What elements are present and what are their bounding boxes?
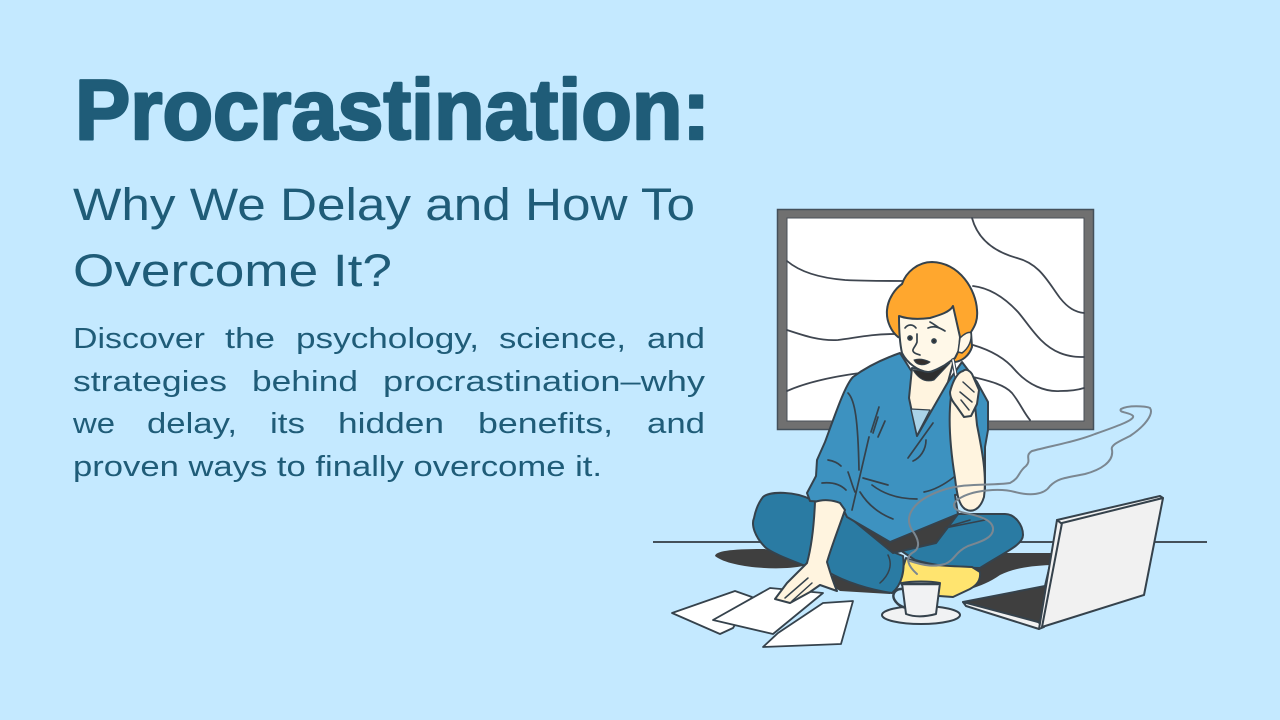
chest and neck skin [909,356,955,436]
description text block: hidden [338,408,444,440]
dark waistband shadow [843,512,958,553]
description text block: the [225,323,275,355]
description text block: strategies [73,366,227,398]
steam [908,406,1151,574]
description text block: we [72,408,115,440]
title: Procrastination: [75,63,710,158]
person [672,262,1163,647]
description text block: Discover [73,323,205,355]
subtitle: Why We Delay and How To [73,179,695,230]
description text block: behind [252,366,358,398]
right leg [900,514,1023,568]
description text block: and [647,323,705,355]
hand and pen [950,360,979,417]
inner shirt [911,409,930,435]
face [899,306,960,372]
subtitle: Overcome It? [73,245,392,296]
foot [899,558,980,597]
papers [672,588,853,647]
subtitle [73,179,695,296]
ear [958,332,971,353]
neck shadow [913,363,950,381]
description text block: science, [499,323,626,355]
description text block: psychology, [296,323,479,355]
wall picture frame [778,210,1094,430]
raised forearm [950,396,985,511]
hair back and ear [887,262,977,362]
leg fold lines [880,520,985,583]
description text block: its [270,408,305,440]
floor line [653,541,1207,543]
floor shadows [715,549,1052,594]
left leg [753,493,904,593]
left arm and hand [775,500,845,603]
torso and shirt [807,353,988,542]
description text block: proven ways to finally overcome it. [73,451,602,483]
coffee cup and saucer [882,582,960,624]
description text block: and [647,408,705,440]
description text block: delay, [147,408,237,440]
shirt fold lines [822,393,954,519]
description text block [72,323,706,483]
description text block: benefits, [478,408,613,440]
facial features [905,322,945,365]
description text block: procrastination–why [383,366,706,398]
laptop [963,496,1163,629]
